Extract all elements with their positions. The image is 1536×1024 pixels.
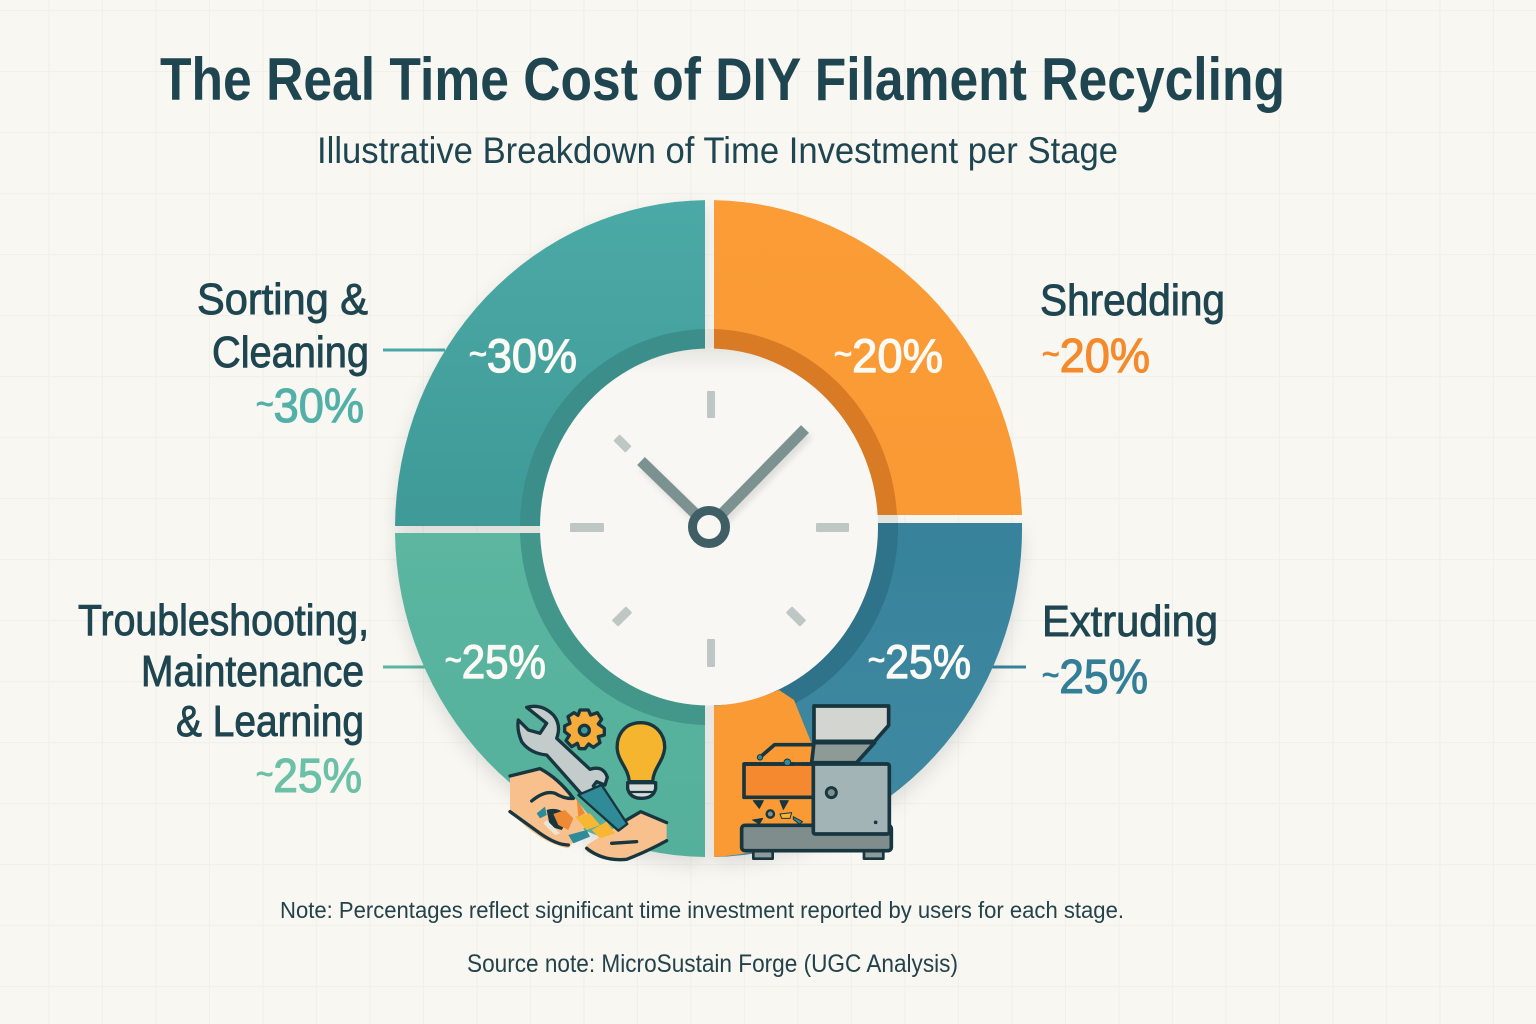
label: extruding [1042, 597, 1218, 704]
label: sorting and cleaning [197, 275, 369, 433]
slice value: 25 percent left: 25% [462, 635, 546, 688]
machine base [742, 825, 891, 851]
icon: bulb [617, 723, 665, 782]
clock ring chart [395, 200, 1022, 857]
band gaps [520, 329, 898, 533]
segment: sorting and cleaning [395, 200, 705, 526]
icon: wrench [518, 706, 607, 800]
icon: gear [565, 710, 604, 749]
slice value: 20 percent: 20% [852, 329, 943, 382]
label: shredding [1040, 276, 1225, 383]
slice value: 20 percent: ~ [834, 336, 852, 372]
label: shredding: 20% [1060, 330, 1150, 383]
machine body [813, 764, 889, 834]
icon: hand right [587, 812, 667, 860]
machine dial [826, 788, 836, 798]
label: troubleshooting, maintenance and learning: ~ [256, 756, 273, 792]
slice value: 25 percent right: ~ [868, 642, 885, 678]
machine feet [753, 850, 883, 859]
icon: shredder machine [742, 706, 891, 859]
inner band: troubleshooting [520, 533, 705, 725]
segment: extruding [714, 523, 1022, 857]
label: sorting and cleaning: Sorting & [197, 275, 368, 324]
label: extruding: Extruding [1042, 597, 1218, 646]
clock face [540, 348, 878, 706]
label: sorting and cleaning: Cleaning [212, 328, 369, 377]
note: Note: Percentages reflect significant time investment reported by users for each stage. [280, 897, 1124, 923]
connector lines [383, 350, 1026, 667]
machine scraps [753, 755, 803, 824]
label: extruding: 25% [1059, 651, 1148, 704]
subtitle: Illustrative Breakdown of Time Investment per Stage [317, 130, 1118, 171]
label: shredding: ~ [1042, 336, 1060, 372]
label: sorting and cleaning: 30% [274, 380, 364, 433]
segment: shredding [714, 200, 1022, 515]
source note: Source note: MicroSustain Forge (UGC Analysis) [467, 950, 958, 978]
label: shredding: Shredding [1040, 276, 1225, 325]
slice value: 30 percent: 30% [487, 329, 577, 382]
label: troubleshooting, maintenance and learning: Troubleshooting, [78, 596, 369, 645]
machine left box [744, 764, 814, 797]
slice value: 25 percent left: ~ [445, 642, 462, 678]
inner band: sorting [520, 329, 705, 526]
label: troubleshooting, maintenance and learning [78, 596, 369, 803]
inner band: shredding [714, 329, 897, 515]
icon: tools, gear, light bulb and hands [510, 706, 667, 860]
slice value: 25 percent right: 25% [885, 635, 971, 688]
label: troubleshooting, maintenance and learning: 25% [273, 750, 362, 803]
label: troubleshooting, maintenance and learning: & Learning [176, 697, 364, 746]
clock hands [641, 429, 805, 527]
clock hub [692, 510, 726, 544]
clock ticks [570, 391, 849, 667]
slice value: 30 percent: ~ [469, 336, 487, 372]
inner band: extruding [714, 523, 898, 725]
orange lower wedge [714, 690, 813, 857]
label: extruding: ~ [1042, 657, 1059, 693]
icon: scrap pieces [537, 798, 615, 843]
label: troubleshooting, maintenance and learning: Maintenance [141, 647, 364, 696]
title: The Real Time Cost of DIY Filament Recycling [160, 46, 1285, 113]
label: sorting and cleaning: ~ [256, 386, 274, 422]
machine hopper [812, 743, 875, 763]
segment: troubleshooting, maintenance and learning [395, 533, 705, 857]
icon: hand left [510, 769, 592, 848]
